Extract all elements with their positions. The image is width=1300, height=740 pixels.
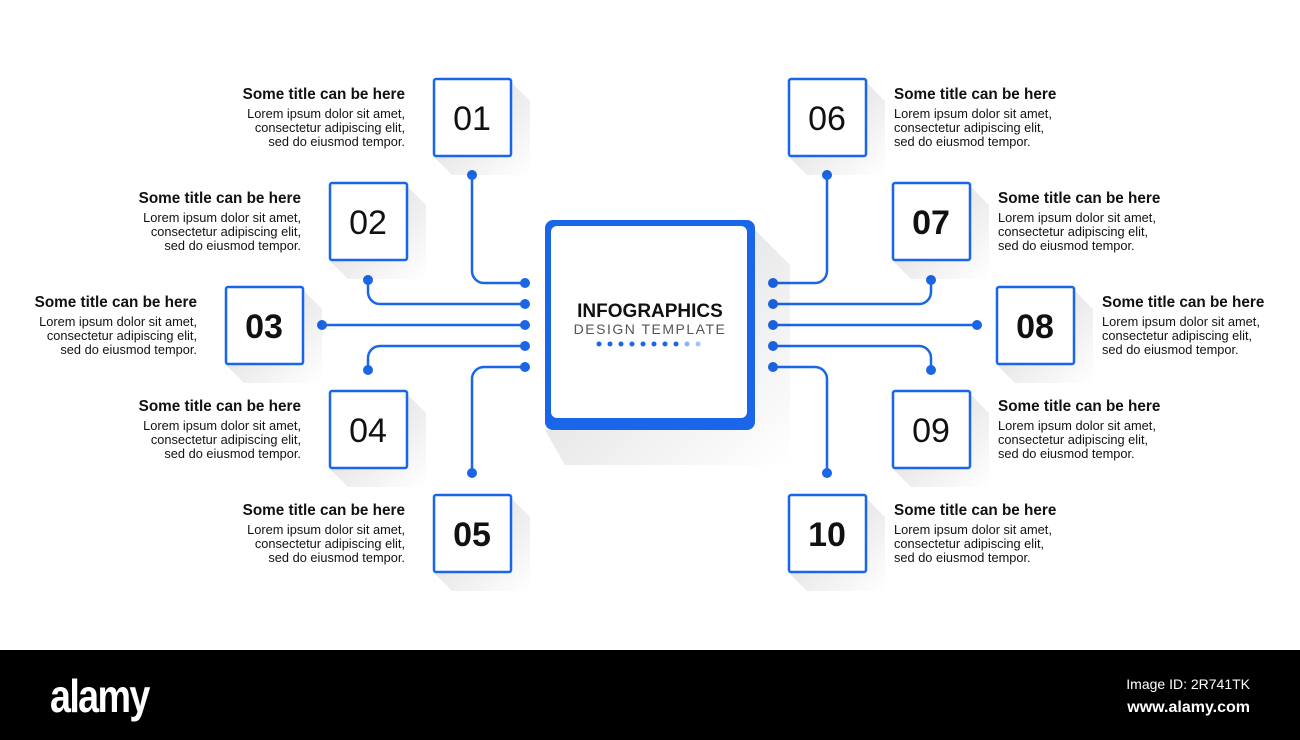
- text 03: Some title can be here: [35, 294, 197, 311]
- center box: [545, 220, 790, 465]
- text 08: Lorem ipsum dolor sit amet,: [1102, 314, 1260, 329]
- box 02: 02: [349, 204, 387, 242]
- text 02: Lorem ipsum dolor sit amet,: [143, 210, 301, 225]
- box 07: [892, 183, 989, 279]
- text 10: Lorem ipsum dolor sit amet,: [894, 522, 1052, 537]
- box 10: [788, 495, 885, 591]
- box 06: 06: [808, 100, 846, 138]
- box 03: 03: [245, 308, 283, 346]
- text 01: consectetur adipiscing elit,: [255, 120, 405, 135]
- text blocks right: [894, 86, 1264, 565]
- text 03: [35, 294, 197, 357]
- text 04: consectetur adipiscing elit,: [151, 432, 301, 447]
- text 01: [243, 86, 405, 149]
- footer bar: alamy: [50, 670, 151, 722]
- text 09: Lorem ipsum dolor sit amet,: [998, 418, 1156, 433]
- text 06: Lorem ipsum dolor sit amet,: [894, 106, 1052, 121]
- text 09: [998, 398, 1160, 461]
- box 02: [329, 183, 426, 279]
- text 04: [139, 398, 301, 461]
- text 03: consectetur adipiscing elit,: [47, 328, 197, 343]
- text 02: consectetur adipiscing elit,: [151, 224, 301, 239]
- text 07: Some title can be here: [998, 190, 1160, 207]
- connector dots: [317, 170, 982, 478]
- text 03: Lorem ipsum dolor sit amet,: [39, 314, 197, 329]
- text 01: Some title can be here: [243, 86, 405, 103]
- text 05: sed do eiusmod tempor.: [268, 550, 405, 565]
- box 09: [892, 391, 989, 487]
- text 02: [139, 190, 301, 253]
- box 01: [433, 79, 530, 175]
- text 04: sed do eiusmod tempor.: [164, 446, 301, 461]
- box 04: [329, 391, 426, 487]
- text 05: Some title can be here: [243, 502, 405, 519]
- text 10: [894, 502, 1056, 565]
- text 10: consectetur adipiscing elit,: [894, 536, 1044, 551]
- box 06: [788, 79, 885, 175]
- box 10: 10: [808, 516, 846, 554]
- footer bar: www.alamy.com: [1126, 699, 1250, 716]
- text 08: sed do eiusmod tempor.: [1102, 342, 1239, 357]
- text 04: Lorem ipsum dolor sit amet,: [143, 418, 301, 433]
- box 01: 01: [453, 100, 491, 138]
- center box: INFOGRAPHICS: [577, 301, 723, 322]
- text 06: consectetur adipiscing elit,: [894, 120, 1044, 135]
- text 06: sed do eiusmod tempor.: [894, 134, 1031, 149]
- text 05: Lorem ipsum dolor sit amet,: [247, 522, 405, 537]
- text 02: sed do eiusmod tempor.: [164, 238, 301, 253]
- connectors: [322, 175, 977, 473]
- box 04: 04: [349, 412, 387, 450]
- text 06: [894, 86, 1056, 149]
- text 05: [243, 502, 405, 565]
- text 03: sed do eiusmod tempor.: [60, 342, 197, 357]
- text 07: Lorem ipsum dolor sit amet,: [998, 210, 1156, 225]
- box 09: 09: [912, 412, 950, 450]
- text 09: consectetur adipiscing elit,: [998, 432, 1148, 447]
- text 10: Some title can be here: [894, 502, 1056, 519]
- box 05: 05: [453, 516, 491, 554]
- text 07: sed do eiusmod tempor.: [998, 238, 1135, 253]
- box 05: [433, 495, 530, 591]
- text 07: [998, 190, 1160, 253]
- number boxes: [225, 79, 1093, 591]
- text 01: Lorem ipsum dolor sit amet,: [247, 106, 405, 121]
- text 08: [1102, 294, 1264, 357]
- text 04: Some title can be here: [139, 398, 301, 415]
- box 03: [225, 287, 322, 383]
- text 01: sed do eiusmod tempor.: [268, 134, 405, 149]
- text 07: consectetur adipiscing elit,: [998, 224, 1148, 239]
- text 09: sed do eiusmod tempor.: [998, 446, 1135, 461]
- text 05: consectetur adipiscing elit,: [255, 536, 405, 551]
- text 10: sed do eiusmod tempor.: [894, 550, 1031, 565]
- text blocks left: [35, 86, 405, 565]
- text 06: Some title can be here: [894, 86, 1056, 103]
- text 02: Some title can be here: [139, 190, 301, 207]
- box 08: 08: [1016, 308, 1054, 346]
- text 08: consectetur adipiscing elit,: [1102, 328, 1252, 343]
- center box: DESIGN TEMPLATE: [574, 321, 726, 337]
- text 08: Some title can be here: [1102, 294, 1264, 311]
- footer bar: [0, 650, 1300, 740]
- box 07: 07: [912, 204, 950, 242]
- box 08: [996, 287, 1093, 383]
- text 09: Some title can be here: [998, 398, 1160, 415]
- footer bar: Image ID: 2R741TK: [1126, 676, 1251, 692]
